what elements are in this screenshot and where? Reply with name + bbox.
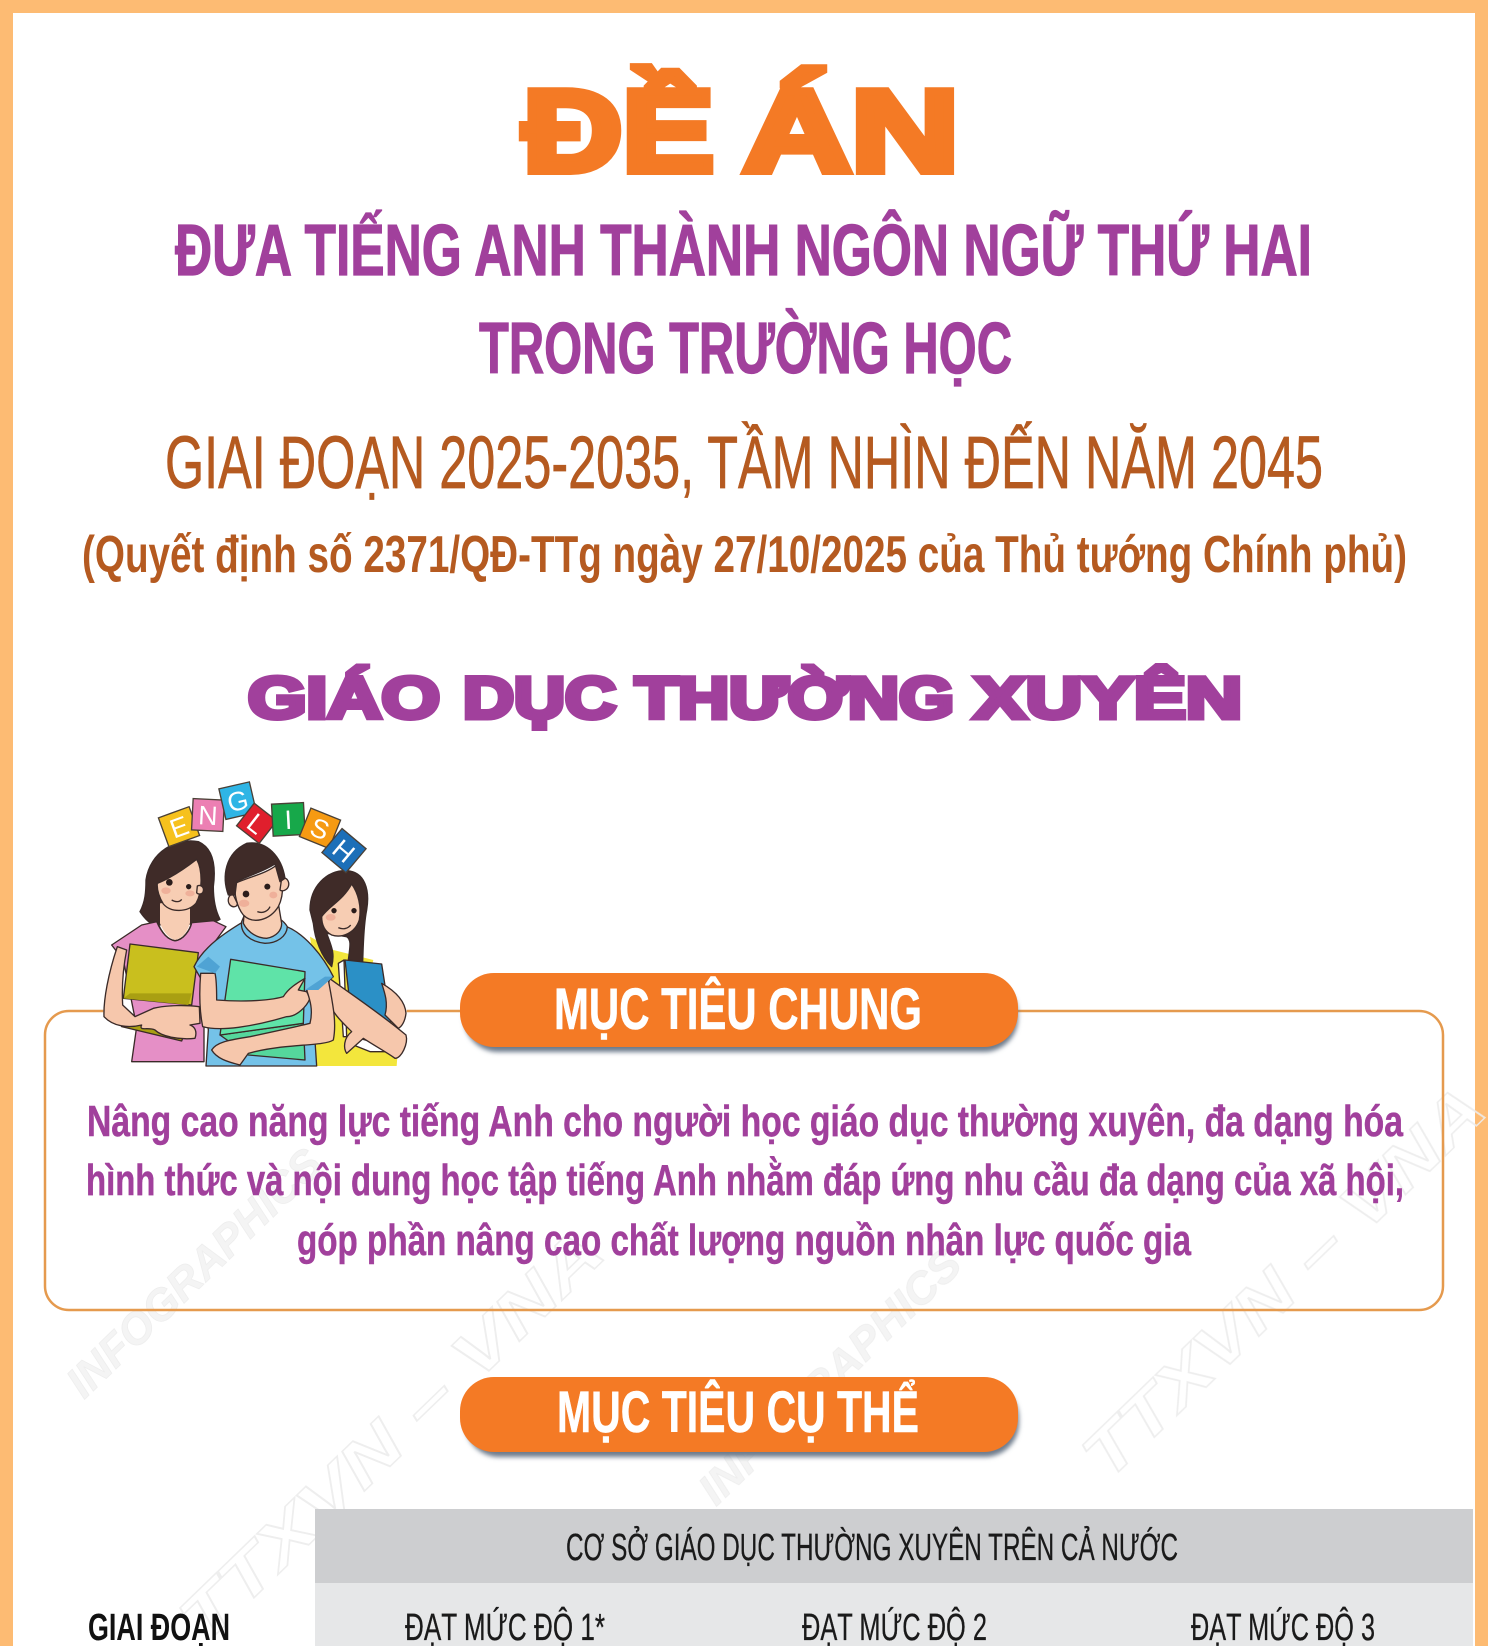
letter blocks: ENGLISH: E [166, 810, 193, 844]
title: ĐỀ ÁN: ĐỀ [523, 66, 714, 196]
pill: general objective heading [460, 973, 1018, 1052]
watermarks: TTXVN – VNA [165, 1214, 618, 1646]
section heading: continuing education [248, 666, 1242, 731]
letter blocks: ENGLISH: N [198, 800, 218, 831]
watermarks: INFOGRAPHICS [689, 1239, 971, 1514]
title: ĐỀ ÁN: ÁN [743, 66, 959, 196]
general objective text [86, 1097, 1404, 1265]
pill: specific objectives heading [460, 1377, 1019, 1457]
left girl [104, 841, 226, 1062]
section heading: continuing education: GIÁO [248, 666, 440, 731]
section heading: continuing education: XUYÊN [974, 666, 1242, 731]
section heading: continuing education: DỤC [463, 666, 616, 731]
subtitle line 2: TRONG TRƯỜNG HỌC [479, 308, 1012, 389]
boy [194, 843, 335, 1066]
letter blocks: ENGLISH: S [306, 812, 334, 846]
letter blocks: ENGLISH: L [241, 807, 271, 840]
illustration: students with English letter blocks [103, 782, 407, 1066]
right girl [310, 871, 406, 1066]
watermarks: INFOGRAPHICS [57, 1139, 332, 1407]
title: ĐỀ ÁN [523, 66, 959, 196]
letter blocks: ENGLISH [158, 782, 366, 873]
pill: specific objectives heading: MỤC TIÊU CỤ THỂ [557, 1380, 919, 1445]
pill: general objective heading: MỤC TIÊU CHUNG [554, 977, 922, 1042]
watermarks: TTXVN – VNA [1068, 1072, 1488, 1492]
letter blocks: ENGLISH: G [224, 784, 251, 818]
letter blocks: ENGLISH: H [327, 833, 361, 869]
panel: general objective [45, 1011, 1443, 1310]
letter blocks: ENGLISH: I [284, 805, 293, 835]
general objective text: góp phần nâng cao chất lượng nguồn nhân lực quốc gia [297, 1216, 1191, 1265]
table: specific objectives [88, 1509, 1473, 1646]
section heading: continuing education: THƯỜNG [635, 666, 954, 731]
watermarks [57, 1072, 1488, 1646]
